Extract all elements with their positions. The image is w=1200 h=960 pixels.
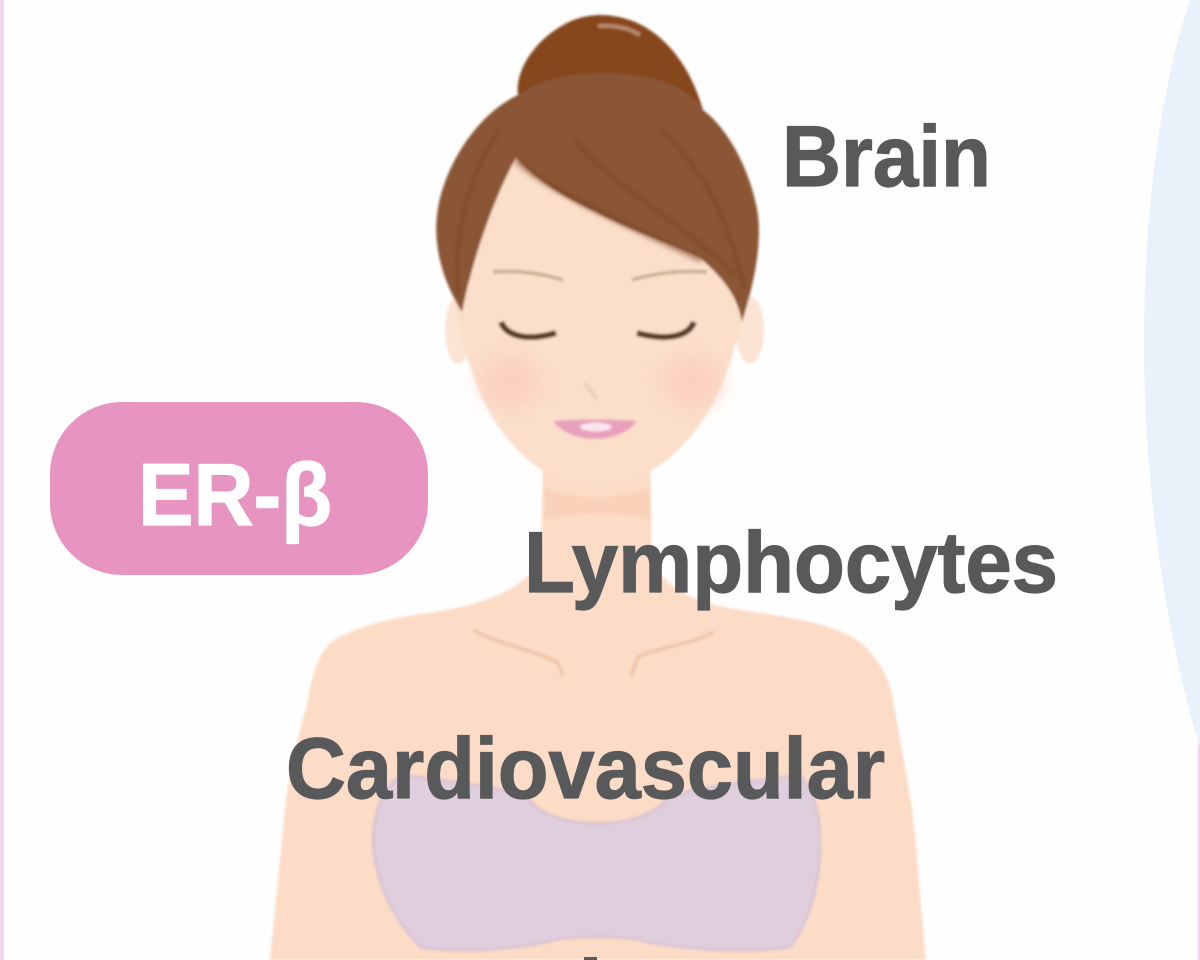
right pink edge strip [1198, 740, 1200, 960]
hair bun shading [518, 15, 703, 110]
clipped ascender of the next label [584, 957, 597, 960]
right closed eye [637, 322, 694, 337]
ears [445, 296, 471, 364]
left collarbone [473, 630, 563, 676]
right collarbone [631, 632, 714, 676]
cheeks [480, 356, 540, 408]
illustration: woman with eyes closed [270, 15, 926, 960]
lips [553, 420, 637, 439]
pill badge: ER-β [50, 402, 428, 575]
hair strands [457, 130, 745, 295]
hair [436, 15, 759, 322]
neck shadow [544, 488, 651, 520]
bun highlight [598, 26, 640, 35]
body skin [270, 450, 926, 960]
left closed eye [501, 322, 556, 337]
right blue curved panel [1144, 0, 1200, 748]
top garment [373, 775, 820, 950]
lip highlight [580, 422, 612, 432]
left pink edge strip [0, 0, 4, 960]
badge label: ER-β [138, 445, 332, 544]
face [452, 140, 746, 487]
nose [585, 383, 597, 399]
label: Brain: Brain [782, 109, 991, 205]
eyebrows [493, 271, 563, 280]
label: Lymphocytes: Lymphocytes [524, 515, 1058, 611]
label: Cardiovascular: Cardiovascular [286, 721, 885, 817]
